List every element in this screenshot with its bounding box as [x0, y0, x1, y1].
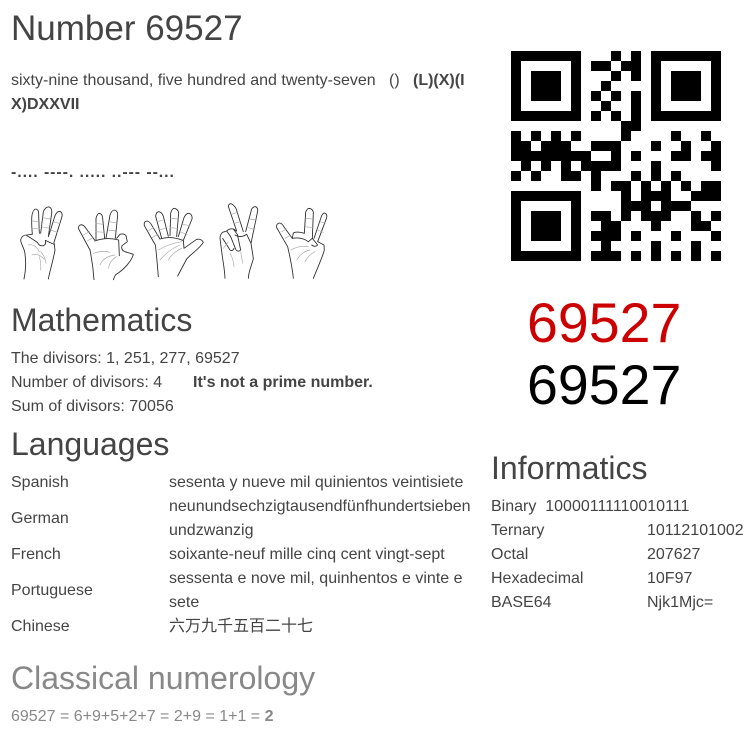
informatics table: Njk1Mjc= [647, 594, 713, 611]
prime status: It's not a prime number. [193, 374, 373, 391]
language names: Portuguese [11, 582, 93, 599]
hexadecimal value [491, 570, 692, 587]
large number in black: 69527 [527, 354, 681, 416]
informatics table: 10112101002 [647, 522, 744, 539]
base64 value [491, 594, 713, 611]
sum of divisors: Sum of divisors: 70056 [11, 398, 174, 415]
number in words and roman numeral [11, 72, 465, 113]
ternary value: Ternary [491, 522, 544, 539]
hexadecimal value: Hexadecimal [491, 570, 583, 587]
morse code: -.... ----. ..... ..--- --... [11, 164, 175, 181]
translations: sesenta y nueve mil quinientos veintisiete [169, 474, 463, 491]
translations: 六万九千五百二十七 [169, 618, 313, 635]
icon: hand nine [79, 210, 133, 280]
icon: QR code [511, 51, 721, 261]
octal value [491, 546, 700, 563]
icon: hand two [220, 204, 258, 278]
number in words and roman numeral: sixty-nine thousand, five hundred and twenty-seven () (L)(X)(I [11, 72, 465, 89]
language names: German [11, 510, 69, 527]
heading: languages: Languages [11, 426, 169, 462]
translations [169, 474, 471, 635]
heading: mathematics: Mathematics [11, 302, 192, 338]
heading: classical numerology: Classical numerology [11, 660, 315, 696]
number in words and roman numeral: X)DXXVII [11, 96, 79, 113]
informatics table [491, 498, 744, 611]
translations: sessenta e nove mil, quinhentos e vinte e [169, 570, 463, 587]
language names: French [11, 546, 61, 563]
translations: undzwanzig [169, 522, 254, 539]
numerology sum: 69527 = 6+9+5+2+7 = 2+9 = 1+1 = 2 [11, 708, 273, 725]
icon: hand seven [277, 208, 327, 278]
informatics table: 10F97 [647, 570, 692, 587]
icon: hands spelling the digits [20, 203, 328, 280]
heading: informatics: Informatics [491, 450, 647, 486]
large number in red: 69527 [527, 292, 681, 354]
icon: hand five [144, 208, 203, 277]
languages table [11, 474, 471, 635]
base64 value: BASE64 [491, 594, 551, 611]
mathematics facts [11, 350, 373, 415]
number of divisors: Number of divisors: 4 [11, 374, 162, 391]
translations: soixante-neuf mille cinq cent vingt-sept [169, 546, 445, 563]
binary value: Binary 10000111110010111 [491, 498, 689, 515]
title: Number 69527 [11, 9, 243, 48]
language names [11, 474, 93, 635]
language names: Chinese [11, 618, 70, 635]
icon: hand six [21, 207, 62, 279]
translations: sete [169, 594, 199, 611]
divisors list: The divisors: 1, 251, 277, 69527 [11, 350, 240, 367]
language names: Spanish [11, 474, 69, 491]
translations: neunundsechzigtausendfünfhundertsieben [169, 498, 471, 515]
informatics table: 207627 [647, 546, 700, 563]
ternary value [491, 522, 744, 539]
octal value: Octal [491, 546, 528, 563]
